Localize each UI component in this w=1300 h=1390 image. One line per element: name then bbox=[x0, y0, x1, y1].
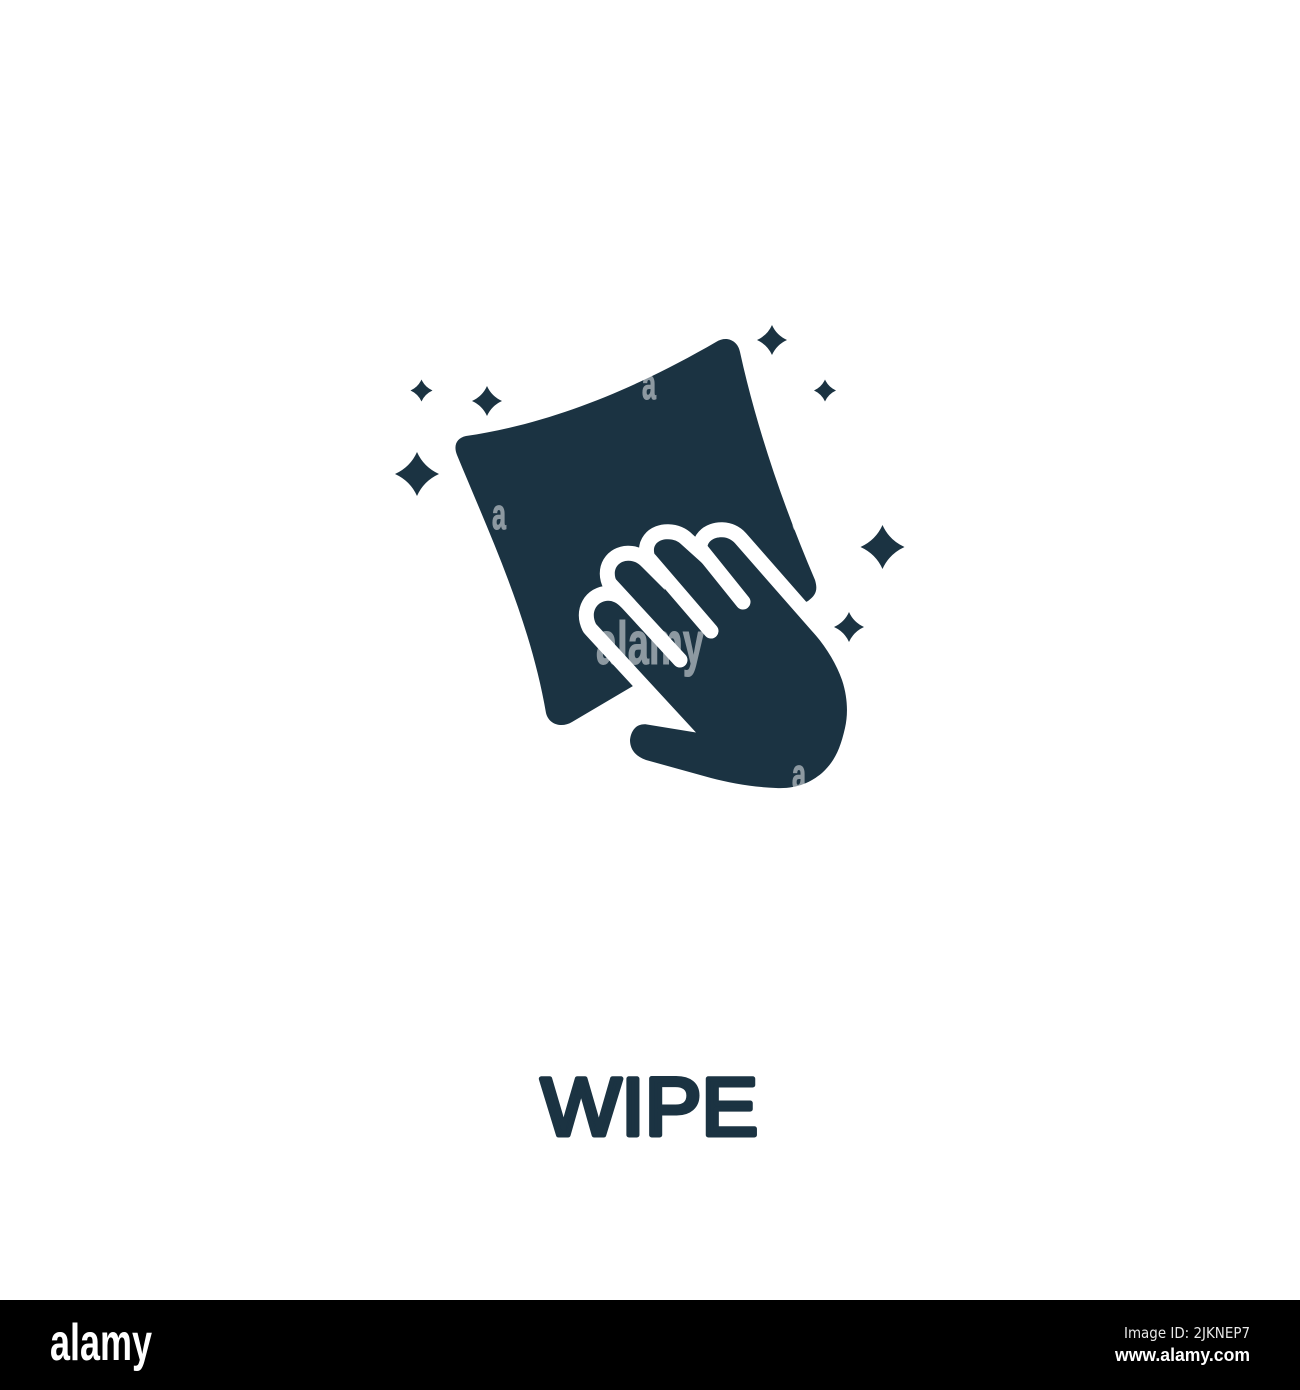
title: WIPE bbox=[541, 1062, 758, 1153]
watermark: alamy centre: alamy bbox=[596, 610, 704, 677]
sparkle bbox=[757, 325, 787, 355]
website: www.alamy.com bbox=[1114, 1345, 1250, 1365]
sparkle bbox=[410, 380, 432, 402]
watermark: a: a bbox=[792, 491, 806, 540]
image id: Image ID: 2JKNEP7 bbox=[1124, 1324, 1250, 1342]
watermark: a: a bbox=[642, 360, 656, 409]
sparkle bbox=[472, 386, 502, 416]
watermarks bbox=[492, 360, 806, 799]
footer bar bbox=[0, 1300, 1300, 1390]
watermark: a: a bbox=[492, 490, 506, 539]
sparkle bbox=[834, 612, 864, 642]
sparkles bbox=[395, 325, 904, 642]
footer logo: alamy bbox=[50, 1314, 152, 1372]
sparkle bbox=[860, 525, 904, 569]
sparkle bbox=[814, 380, 836, 402]
finger separators bbox=[610, 546, 743, 660]
icon: hand wiping with cloth bbox=[395, 325, 904, 788]
sparkle bbox=[395, 452, 439, 496]
hand silhouette bbox=[594, 537, 847, 788]
icon: cloth bbox=[455, 339, 816, 725]
icon: hand bbox=[594, 537, 847, 788]
watermark: a: a bbox=[792, 750, 806, 799]
